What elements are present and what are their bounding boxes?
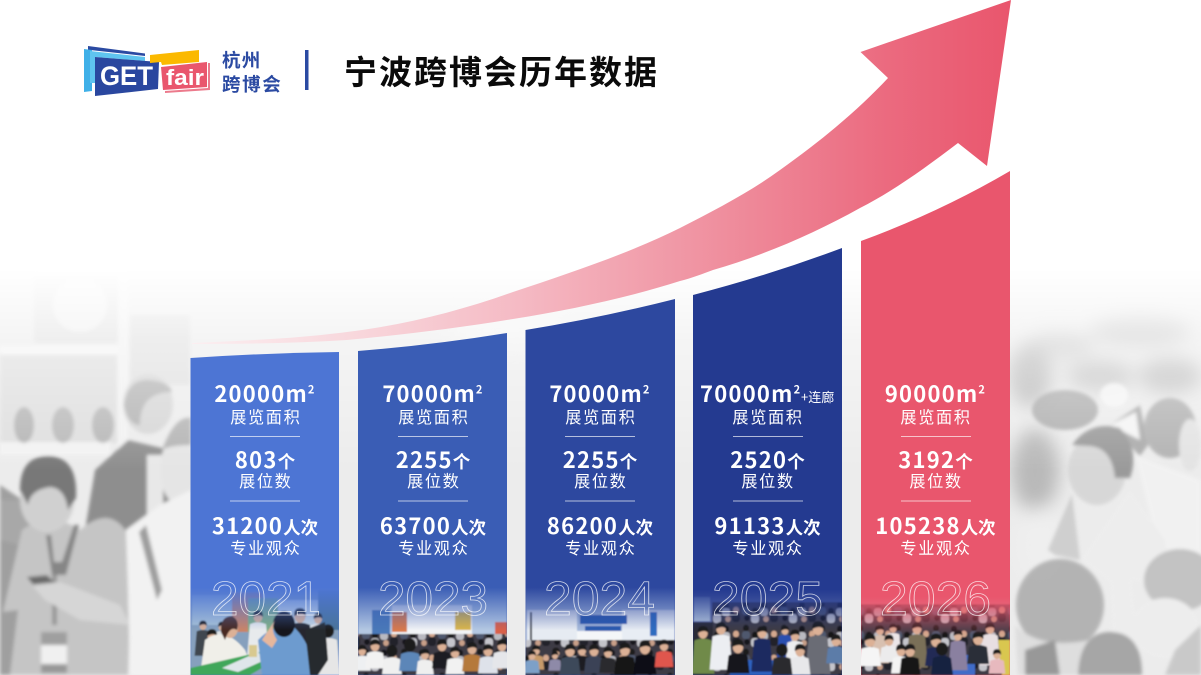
photo: 2026 dense crowd [861,604,1010,675]
stat: exhibition area with corridor: +连廊 [801,387,834,406]
year outline 2025: 2025 [712,573,823,626]
panel: 2021: 专业观众 [230,535,301,559]
panel: 2025: 展览面积 [732,404,804,428]
stat: exhibition area: 2 [643,382,651,398]
panel: 2023: 展览面积 [398,404,469,428]
panel: 2026: 展位数 [909,468,963,492]
stat: exhibition area: 2 [308,382,316,398]
panel: 2021 [190,352,340,675]
panel: 2024 [524,299,675,675]
photo: 2023 hall entrance [358,590,507,675]
stat: exhibition area: 70000m [382,377,476,409]
stat: exhibition area: 90000m [885,377,978,409]
panel: 2023 [353,333,512,675]
year outline 2023: 2023 [378,573,488,626]
stat: booths: 2255个 [563,443,638,475]
background: greyscale crowd photo [0,304,1201,675]
stat: visitors: 91133人次 [714,509,821,541]
header divider [305,50,308,90]
logo: GET fair Hangzhou cross-border fair: 杭州 [222,47,261,73]
stat: booths: 3192个 [898,443,973,475]
panel: 2024: 专业观众 [565,535,636,559]
panel: 2025: 专业观众 [732,535,804,559]
logo: GET fair Hangzhou cross-border fair [84,46,282,97]
panel: 2026: 专业观众 [900,535,972,559]
stat: exhibition area: 20000m [214,377,308,409]
logo: GET fair Hangzhou cross-border fair: fair [166,65,204,90]
stat: exhibition area: 70000m [549,377,643,409]
stat: exhibition area with corridor: 2 [794,382,801,398]
title: 宁波跨博会历年数据 [344,46,659,94]
stat: booths: 803个 [235,443,296,475]
panel: 2024: 展览面积 [565,404,636,428]
panel: 2023: 展位数 [407,468,460,492]
year outline 2024: 2024 [544,573,655,626]
stat: visitors: 86200人次 [547,509,654,541]
panel: 2021: 展览面积 [230,404,301,428]
panel: 2023: 专业观众 [398,535,469,559]
panel: 2026 [859,171,1010,675]
panel: 2025 [692,248,846,675]
stat: exhibition area: 2 [978,382,986,398]
panel: 2024: 展位数 [574,468,627,492]
year outline 2021: 2021 [211,573,321,626]
panel: 2026: 展览面积 [900,404,972,428]
stat: exhibition area with corridor [700,377,834,409]
growth arrow [192,0,1011,344]
logo: GET fair Hangzhou cross-border fair: GET [100,61,153,91]
panel: 2025: 展位数 [741,468,795,492]
photo: 2024 hall crowd [526,590,675,675]
panel: 2021: 展位数 [239,468,292,492]
stat: visitors: 105238人次 [875,509,996,541]
photo: 2021 exhibitors [190,592,339,675]
stat: booths: 2520个 [730,443,805,475]
stat: visitors: 31200人次 [212,509,319,541]
logo: GET fair Hangzhou cross-border fair: 跨博会 [222,71,282,97]
stat: exhibition area: 2 [476,382,484,398]
photo: 2025 dense crowd [693,594,842,675]
year outline 2026: 2026 [880,573,991,626]
stat: exhibition area with corridor: 70000m [700,377,794,409]
stat: visitors: 63700人次 [380,509,487,541]
stat: booths: 2255个 [396,443,471,475]
